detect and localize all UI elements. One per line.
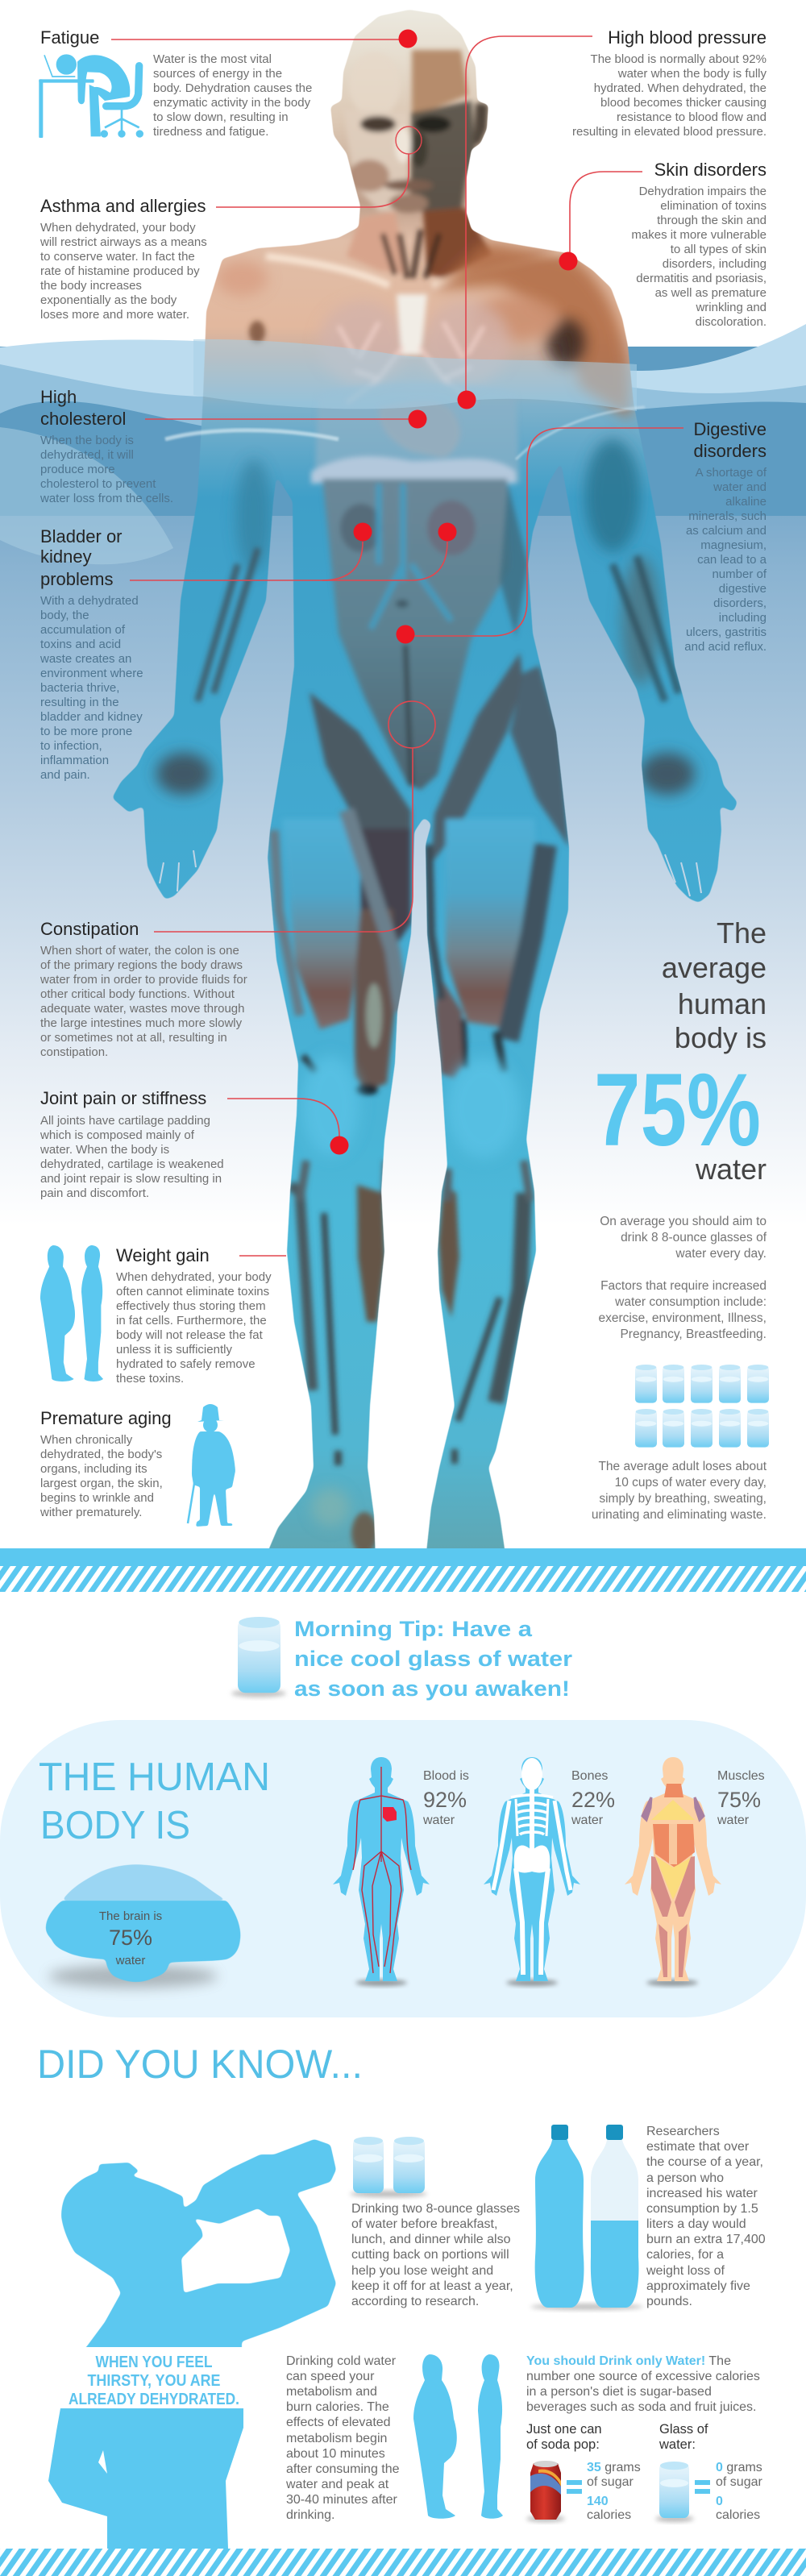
text: cold water: 30-40 minutes after <box>286 2493 398 2507</box>
text: bladder or kidney problems: and pain. <box>40 768 90 782</box>
internal organs <box>311 383 520 484</box>
text: premature aging: begins to wrinkle and <box>40 1491 154 1505</box>
text: cold water: water and peak at <box>285 2478 389 2491</box>
text: water loss: The average adult loses about <box>598 1460 767 1473</box>
text: premature aging: wither prematurely. <box>39 1506 142 1519</box>
text: premature aging: When chronically <box>40 1433 133 1447</box>
panel: constipation <box>39 919 247 1059</box>
chart: brain is 75% water: water <box>115 1954 145 1967</box>
text: skin disorders: elimination of toxins <box>660 199 767 213</box>
text: daily intake <box>600 1215 767 1261</box>
text: skin disorders <box>631 185 767 329</box>
text: water loss: simply by breathing, sweating, <box>599 1492 767 1506</box>
text: drink only water: beverages such as soda and fruit juices. <box>526 2400 756 2414</box>
text: digestive disorders: A shortage of <box>696 466 767 480</box>
text: daily intake: drink 8 8-ounce glasses of <box>621 1231 767 1244</box>
text: digestive disorders: digestive <box>719 582 767 596</box>
chart: blood is 92% water: Blood is <box>423 1769 469 1783</box>
text: high cholesterol: produce more <box>40 463 115 476</box>
icon: overweight and slim silhouettes <box>413 2354 503 2519</box>
callout text: thirst: THIRSTY, YOU ARE <box>87 2372 221 2390</box>
footer stripes <box>0 2549 806 2576</box>
text: cold water: burn calories. The <box>286 2400 389 2414</box>
text: drink only water: You should Drink only Water! The <box>526 2354 731 2368</box>
text: premature aging: organs, including its <box>40 1462 147 1476</box>
text: fatigue: to slow down, resulting in <box>153 110 289 124</box>
heading: premature aging: Premature aging <box>40 1408 172 1428</box>
heading: the average human body is: The <box>717 916 767 949</box>
panel: joint pain or stiffness <box>39 1088 224 1200</box>
text: researchers: calories, for a <box>646 2248 724 2262</box>
panel: bottles and researchers <box>530 2125 766 2310</box>
text: digestive disorders: as calcium and <box>686 524 767 538</box>
text: high blood pressure: hydrated. When dehydrated, the <box>594 81 767 95</box>
text: high cholesterol: dehydrated, it will <box>40 448 134 462</box>
heading: water <box>659 2422 708 2452</box>
heading: digestive disorders: Digestive <box>694 419 767 439</box>
panel: fatigue <box>39 27 312 139</box>
text: joint pain <box>39 1114 224 1200</box>
panel: average human body is 75% water <box>592 916 769 1522</box>
text: cold water: after consuming the <box>286 2462 400 2476</box>
text: digestive disorders: ulcers, gastritis <box>686 625 767 639</box>
text: bladder or kidney problems: bladder and kidney <box>40 710 143 724</box>
chart: bones are 22% water: Bones <box>571 1769 608 1783</box>
text: premature aging: largest organ, the skin, <box>40 1477 163 1490</box>
text: factors: exercise, environment, Illness, <box>599 1311 767 1325</box>
text: two glasses: of water before breakfast, <box>351 2217 497 2231</box>
text: researchers: consumption by 1.5 <box>646 2202 758 2216</box>
head and face <box>343 50 488 213</box>
text: weight gain: body will not release the fat <box>116 1328 264 1342</box>
text: skin disorders: wrinkling and <box>695 301 767 314</box>
text: bladder or kidney problems: to infection, <box>40 739 102 753</box>
text: digestive disorders: number of <box>712 567 767 581</box>
heading: water: Glass of <box>659 2422 708 2437</box>
text: constipation: constipation. <box>40 1045 108 1059</box>
callout text: thirst: ALREADY DEHYDRATED. <box>69 2391 239 2408</box>
heading: the average human body is: body is <box>675 1021 767 1054</box>
heading: the average human body is <box>662 916 767 1054</box>
text: bladder or kidney problems: to be more prone <box>40 725 132 738</box>
heading: bladder or kidney problems: problems <box>40 569 113 589</box>
text: two glasses: help you lose weight and <box>351 2264 493 2278</box>
text: two glasses: cutting back on portions will <box>351 2248 509 2262</box>
heading: soda: Just one can <box>526 2422 602 2437</box>
heading: the average human body is: average <box>662 951 767 984</box>
heading: asthma and allergies: Asthma and allergies <box>40 196 206 216</box>
text: weight gain: in fat cells. Furthermore, the <box>116 1314 267 1327</box>
stats: soda: 140 <box>587 2495 609 2508</box>
text: skin disorders: through the skin and <box>657 214 767 227</box>
text: bladder or kidney problems: inflammation <box>40 754 109 767</box>
text: constipation: the large intestines much more slowly <box>40 1016 243 1030</box>
icon: elderly person with cane <box>188 1404 235 1527</box>
text: fatigue <box>153 52 312 139</box>
heading: high cholesterol: High <box>40 387 77 407</box>
chart: muscles are 75% water <box>625 1757 765 1986</box>
text: constipation: or sometimes not at all, resulting in <box>40 1031 227 1045</box>
neck and shoulders <box>216 208 630 419</box>
heading: the average human body is: human <box>678 987 767 1020</box>
text: asthma and allergies: loses more and more water. <box>40 308 189 322</box>
text: two glasses: according to research. <box>351 2295 479 2308</box>
heading: skin disorders: Skin disorders <box>654 160 767 180</box>
text: skin disorders: as well as premature <box>655 286 767 300</box>
text: digestive disorders <box>684 466 767 654</box>
text: digestive disorders: magnesium, <box>700 538 767 552</box>
heading: high blood pressure: High blood pressure <box>608 27 767 48</box>
text: weight gain: these toxins. <box>116 1372 184 1386</box>
text: researchers: Researchers <box>646 2125 720 2138</box>
text: premature aging <box>39 1433 163 1519</box>
text: fatigue: Water is the most vital <box>153 52 272 66</box>
icon: soda can <box>526 2461 565 2522</box>
heading: high cholesterol <box>40 387 126 429</box>
text: asthma and allergies <box>39 221 207 322</box>
text: factors: Factors that require increased <box>600 1279 767 1293</box>
icon: person slumped at desk <box>39 54 143 138</box>
stats: soda: calories <box>587 2508 631 2522</box>
text: two glasses <box>351 2202 520 2308</box>
text: high cholesterol <box>39 434 173 505</box>
water swooshes <box>165 407 645 459</box>
text: digestive disorders: minerals, such <box>688 509 767 523</box>
equals sign: soda <box>567 2480 582 2494</box>
stats: water: 0 grams <box>716 2461 762 2474</box>
text: researchers: the course of a year, <box>646 2155 763 2169</box>
abdomen <box>322 479 528 790</box>
text: weight gain: unless it is sufficiently <box>116 1343 232 1357</box>
chart: muscles are 75% water: 75% <box>717 1788 761 1812</box>
text: water loss: 10 cups of water every day, <box>615 1476 767 1490</box>
text: factors: water consumption include: <box>614 1295 767 1309</box>
callout text: thirst: WHEN YOU FEEL <box>95 2354 213 2371</box>
text: two glasses: keep it off for at least a year, <box>351 2279 513 2293</box>
icon: ten glasses of water <box>635 1365 769 1448</box>
stats: water: 0 <box>716 2495 723 2508</box>
human anatomical figure <box>97 0 750 1554</box>
heading: the human body is: BODY IS <box>40 1804 190 1847</box>
text: researchers: weight loss of <box>646 2264 725 2278</box>
lungs and sternum <box>318 294 510 403</box>
text: fatigue: tiredness and fatigue. <box>153 125 268 139</box>
thighs <box>274 653 569 1158</box>
icon: glass of water <box>655 2462 694 2522</box>
text: high blood pressure: resistance to blood flow and <box>617 110 767 124</box>
text: researchers: increased his water <box>646 2187 758 2200</box>
text: asthma and allergies: exponentially as the body <box>40 293 177 307</box>
text: bladder or kidney problems: bacteria thrive, <box>40 681 119 695</box>
chart: bones are 22% water: 22% <box>571 1788 615 1812</box>
text: asthma and allergies: to conserve water. In fact the <box>40 250 195 264</box>
text: daily intake: On average you should aim to <box>600 1215 767 1228</box>
text: researchers: liters a day would <box>646 2217 746 2231</box>
chart: blood is 92% water: 92% <box>423 1788 467 1812</box>
text: high cholesterol: water loss from the cells. <box>39 492 173 505</box>
panel: digestive disorders <box>684 419 767 654</box>
text: drink only water: in a person's diet is sugar-based <box>526 2385 712 2399</box>
text: joint pain: pain and discomfort. <box>40 1186 149 1200</box>
heading: soda <box>526 2422 602 2452</box>
chart: brain is 75% water: The brain is <box>99 1909 162 1923</box>
text: two glasses: lunch, and dinner while also <box>351 2233 511 2246</box>
panel: high cholesterol <box>39 387 173 505</box>
heading: bladder or kidney problems: kidney <box>40 546 92 567</box>
text: joint pain: All joints have cartilage padding <box>40 1114 210 1128</box>
text: skin disorders: makes it more vulnerable <box>631 228 767 242</box>
text: water loss <box>592 1460 767 1522</box>
text: researchers: approximately five <box>646 2279 750 2293</box>
text: two glasses: Drinking two 8-ounce glasses <box>351 2202 520 2216</box>
heading: weight gain: Weight gain <box>116 1245 210 1265</box>
panel: asthma and allergies <box>39 196 207 322</box>
callout text: thirst <box>69 2354 239 2408</box>
lower legs <box>290 1161 530 1554</box>
text: researchers <box>646 2125 766 2308</box>
chart: blood is 92% water: water <box>422 1814 455 1827</box>
text: premature aging: dehydrated, the body's <box>40 1448 162 1461</box>
illustration: man drinking from bottle <box>48 2139 336 2549</box>
text: high blood pressure: blood becomes thicker causing <box>600 96 767 110</box>
text: bladder or kidney problems: With a dehydrated <box>40 594 139 608</box>
text: morning tip <box>294 1617 573 1701</box>
text: constipation: water from in order to provide fluids for <box>39 973 247 987</box>
text: cold water: metabolism and <box>286 2385 377 2399</box>
text: high blood pressure <box>572 52 767 139</box>
text: asthma and allergies: When dehydrated, your body <box>40 221 196 235</box>
water overlay on chest <box>193 339 637 411</box>
icon: two glasses <box>350 2137 427 2197</box>
text: fatigue: enzymatic activity in the body <box>153 96 311 110</box>
stats: water: calories <box>716 2508 760 2522</box>
text: weight gain: often cannot eliminate toxins <box>116 1285 269 1298</box>
icon: overweight and slim silhouettes <box>40 1245 103 1381</box>
heading: digestive disorders <box>694 419 767 461</box>
text: skin disorders: discoloration. <box>696 315 767 329</box>
text: bladder or kidney problems: toxins and acid <box>40 638 121 651</box>
heading: joint pain: Joint pain or stiffness <box>40 1088 206 1108</box>
heading: bladder or kidney problems <box>40 526 123 589</box>
text: bladder or kidney problems: environment where <box>40 667 143 680</box>
chart: bones are 22% water <box>484 1757 615 1986</box>
text: cold water: metabolism begin <box>286 2432 387 2445</box>
text: weight gain: When dehydrated, your body <box>116 1270 272 1284</box>
text: drink only water: number one source of excessive calories <box>526 2370 760 2383</box>
heading: digestive disorders: disorders <box>694 441 767 461</box>
text: researchers: burn an extra 17,400 <box>646 2233 766 2246</box>
text: water loss: urinating and eliminating waste. <box>592 1508 767 1522</box>
panel: high blood pressure <box>572 27 767 139</box>
text: high blood pressure: resulting in elevated blood pressure. <box>572 125 767 139</box>
text: bladder or kidney problems <box>39 594 143 782</box>
text: factors: Pregnancy, Breastfeeding. <box>620 1327 767 1341</box>
text: bladder or kidney problems: accumulation of <box>40 623 126 637</box>
stats: soda <box>587 2461 641 2522</box>
text: digestive disorders: and acid reflux. <box>684 640 767 654</box>
text: digestive disorders: including <box>719 611 767 625</box>
text: constipation: When short of water, the colon is one <box>40 944 239 958</box>
heading: water: water: <box>659 2437 696 2452</box>
stats: soda: 35 grams <box>587 2461 641 2474</box>
panel: two glasses before meals <box>350 2137 520 2308</box>
text: cold water: Drinking cold water <box>286 2354 397 2368</box>
chart: bones are 22% water: water <box>571 1814 604 1827</box>
text: researchers: estimate that over <box>646 2140 750 2154</box>
text: bladder or kidney problems: body, the <box>40 609 89 622</box>
text: weight gain: effectively thus storing them <box>116 1299 266 1313</box>
text: cold water: can speed your <box>286 2370 375 2383</box>
chart: muscles are 75% water: Muscles <box>717 1769 765 1783</box>
panel: the human body is <box>0 1720 806 2017</box>
heading: constipation: Constipation <box>40 919 139 939</box>
text: digestive disorders: alkaline <box>725 495 767 509</box>
stats: soda: of sugar <box>587 2475 634 2489</box>
heading: did you know: DID YOU KNOW... <box>37 2042 363 2087</box>
chart: muscles are 75% water: water <box>717 1814 750 1827</box>
text: joint pain: dehydrated, cartilage is weakened <box>40 1157 224 1171</box>
heading: high cholesterol: cholesterol <box>40 409 126 429</box>
text: joint pain: which is composed mainly of <box>39 1128 195 1142</box>
text: skin disorders: dermatitis and psoriasis, <box>636 272 767 285</box>
text: constipation: other critical body functions. Without <box>40 987 235 1001</box>
text: bladder or kidney problems: resulting in the <box>40 696 119 709</box>
icon: glass of water <box>231 1617 286 1697</box>
text: cold water: about 10 minutes <box>286 2447 385 2461</box>
text: daily intake: water every day. <box>675 1247 767 1261</box>
text: skin disorders: disorders, including <box>663 257 767 271</box>
text: researchers: pounds. <box>646 2295 692 2308</box>
text: joint pain: water. When the body is <box>39 1143 169 1157</box>
text: weight gain <box>116 1270 272 1386</box>
text: researchers: a person who <box>646 2171 724 2185</box>
text: cold water <box>285 2354 400 2522</box>
text: skin disorders: to all types of skin <box>671 243 767 256</box>
background: rising water <box>0 324 806 1233</box>
text: morning tip: nice cool glass of water <box>294 1647 573 1671</box>
upper arms <box>156 439 695 795</box>
panel: drink only water <box>526 2354 762 2522</box>
text: morning tip: Morning Tip: Have a <box>294 1617 533 1641</box>
panel: skin disorders <box>631 160 767 329</box>
text: digestive disorders: water and <box>713 480 767 494</box>
heading: soda: of soda pop: <box>526 2437 600 2452</box>
text: constipation: of the primary regions the body draws <box>40 958 243 972</box>
text: skin disorders: Dehydration impairs the <box>639 185 767 198</box>
text: constipation <box>39 944 247 1059</box>
stats: water <box>716 2461 762 2522</box>
stat: 75%: 75% <box>594 1053 761 1168</box>
panel: bladder or kidney problems <box>39 526 143 782</box>
text: constipation: adequate water, wastes move through <box>40 1002 245 1016</box>
heading: bladder or kidney problems: Bladder or <box>40 526 123 546</box>
text: fatigue: body. Dehydration causes the <box>153 81 312 95</box>
text: bladder or kidney problems: waste creates an <box>39 652 131 666</box>
panel: morning tip <box>231 1617 573 1701</box>
callout lines and dots <box>111 29 683 1256</box>
text: digestive disorders: disorders, <box>713 596 767 610</box>
chart: brain is 75% water: 75% <box>109 1926 152 1950</box>
text: drink only water <box>526 2354 760 2414</box>
chart: blood is 92% water <box>333 1757 469 1986</box>
stats: water: of sugar <box>716 2475 762 2489</box>
heading: the human body is: THE HUMAN <box>39 1755 270 1799</box>
icon: full and half bottles <box>530 2125 643 2310</box>
label: water: water <box>695 1153 767 1186</box>
text: high cholesterol: cholesterol to prevent <box>40 477 156 491</box>
text: cold water: drinking. <box>286 2508 334 2522</box>
text: factors <box>599 1279 767 1341</box>
text: asthma and allergies: rate of histamine produced by <box>40 264 200 278</box>
panel: weight gain <box>40 1245 272 1386</box>
text: high cholesterol: When the body is <box>40 434 134 447</box>
heading: the human body is <box>39 1755 270 1847</box>
text: asthma and allergies: the body increases <box>40 279 142 293</box>
text: morning tip: as soon as you awaken! <box>294 1676 570 1701</box>
text: digestive disorders: can lead to a <box>697 553 767 567</box>
text: high blood pressure: The blood is normally about 92% <box>591 52 767 66</box>
bottom of water: base band and stripes <box>0 1548 806 1592</box>
text: asthma and allergies: will restrict airways as a means <box>39 235 207 249</box>
panel: cold water metabolism <box>285 2354 503 2522</box>
panel: premature aging <box>39 1404 235 1527</box>
text: cold water: effects of elevated <box>286 2416 391 2429</box>
text: high blood pressure: water when the body is fully <box>617 67 767 81</box>
text: weight gain: hydrated to safely remove <box>116 1357 256 1371</box>
text: fatigue: sources of energy in the <box>153 67 282 81</box>
chart: brain is 75% water <box>46 1864 240 1988</box>
text: joint pain: and joint repair is slow resulting in <box>40 1172 222 1186</box>
heading: fatigue: Fatigue <box>40 27 99 48</box>
equals sign: water <box>695 2480 710 2494</box>
